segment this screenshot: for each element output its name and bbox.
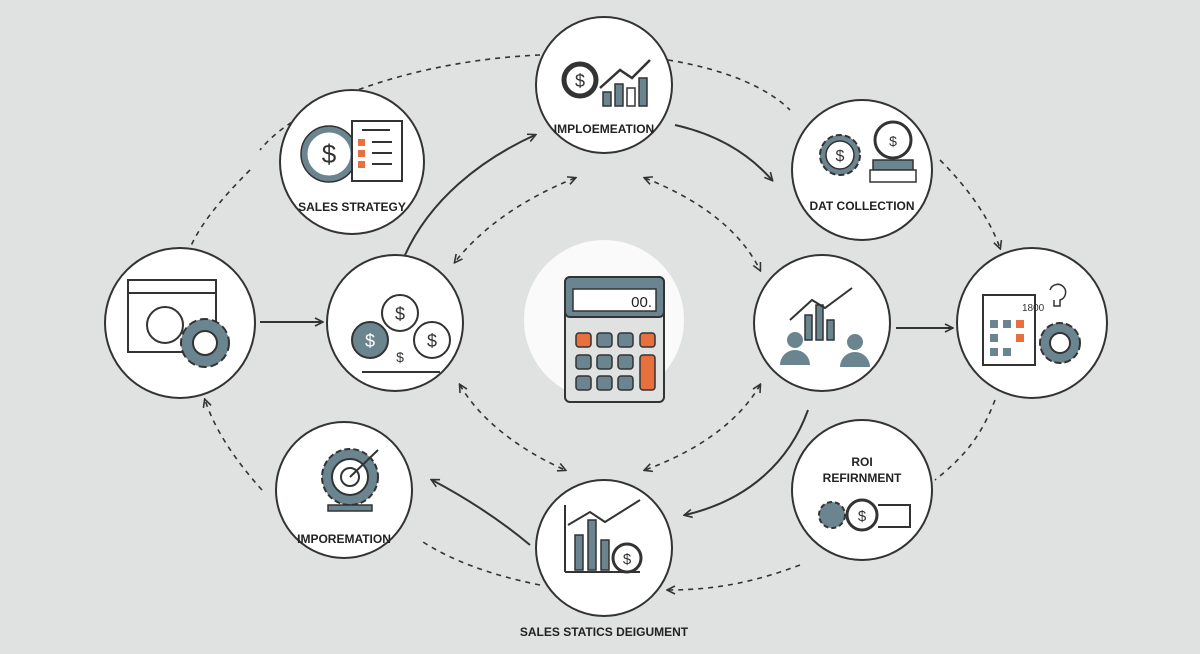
circle: coins [327, 255, 463, 391]
circle: data collection: DAT COLLECTION [809, 199, 915, 213]
circle: sales strategy [280, 90, 424, 234]
circle: right calculator [957, 248, 1107, 398]
circle: ROI refinement: ROI [851, 455, 873, 469]
bottom label: SALES STATICS DEIGUMENT [520, 625, 689, 639]
circle: coins: $ [396, 349, 404, 365]
circle: sales strategy: SALES STRATEGY [298, 200, 406, 214]
circle: sales statistics bottom [536, 480, 672, 616]
dashed inner ring arrows [455, 178, 760, 470]
circle: imporemation target [276, 422, 412, 558]
circle: data collection [792, 100, 932, 240]
circle: sales statistics bottom: $ [623, 551, 632, 568]
solid arrows [260, 125, 952, 545]
circle: left browser gear [105, 248, 255, 398]
circle: ROI refinement: $ [858, 508, 867, 525]
circle: data collection: $ [889, 133, 897, 149]
dashed outer ring arrows [190, 55, 1000, 590]
circle: meeting chart [754, 255, 890, 391]
circle: implementation top: IMPLOEMEATION [554, 122, 654, 136]
circle: sales strategy: $ [322, 139, 337, 169]
circle: ROI refinement [792, 420, 932, 560]
circle: coins: $ [395, 304, 405, 324]
circle: implementation top [536, 17, 672, 153]
circle: implementation top: $ [575, 71, 585, 91]
circle: coins: $ [365, 331, 375, 351]
circle: right calculator: 1800 [1022, 303, 1045, 314]
circle: coins: $ [427, 331, 437, 351]
circle: data collection: $ [836, 148, 845, 165]
circle: ROI refinement: REFIRNMENT [823, 471, 902, 485]
center calculator [524, 240, 684, 402]
circle: imporemation target: IMPOREMATION [297, 532, 391, 546]
center calculator: 00. [631, 294, 652, 311]
